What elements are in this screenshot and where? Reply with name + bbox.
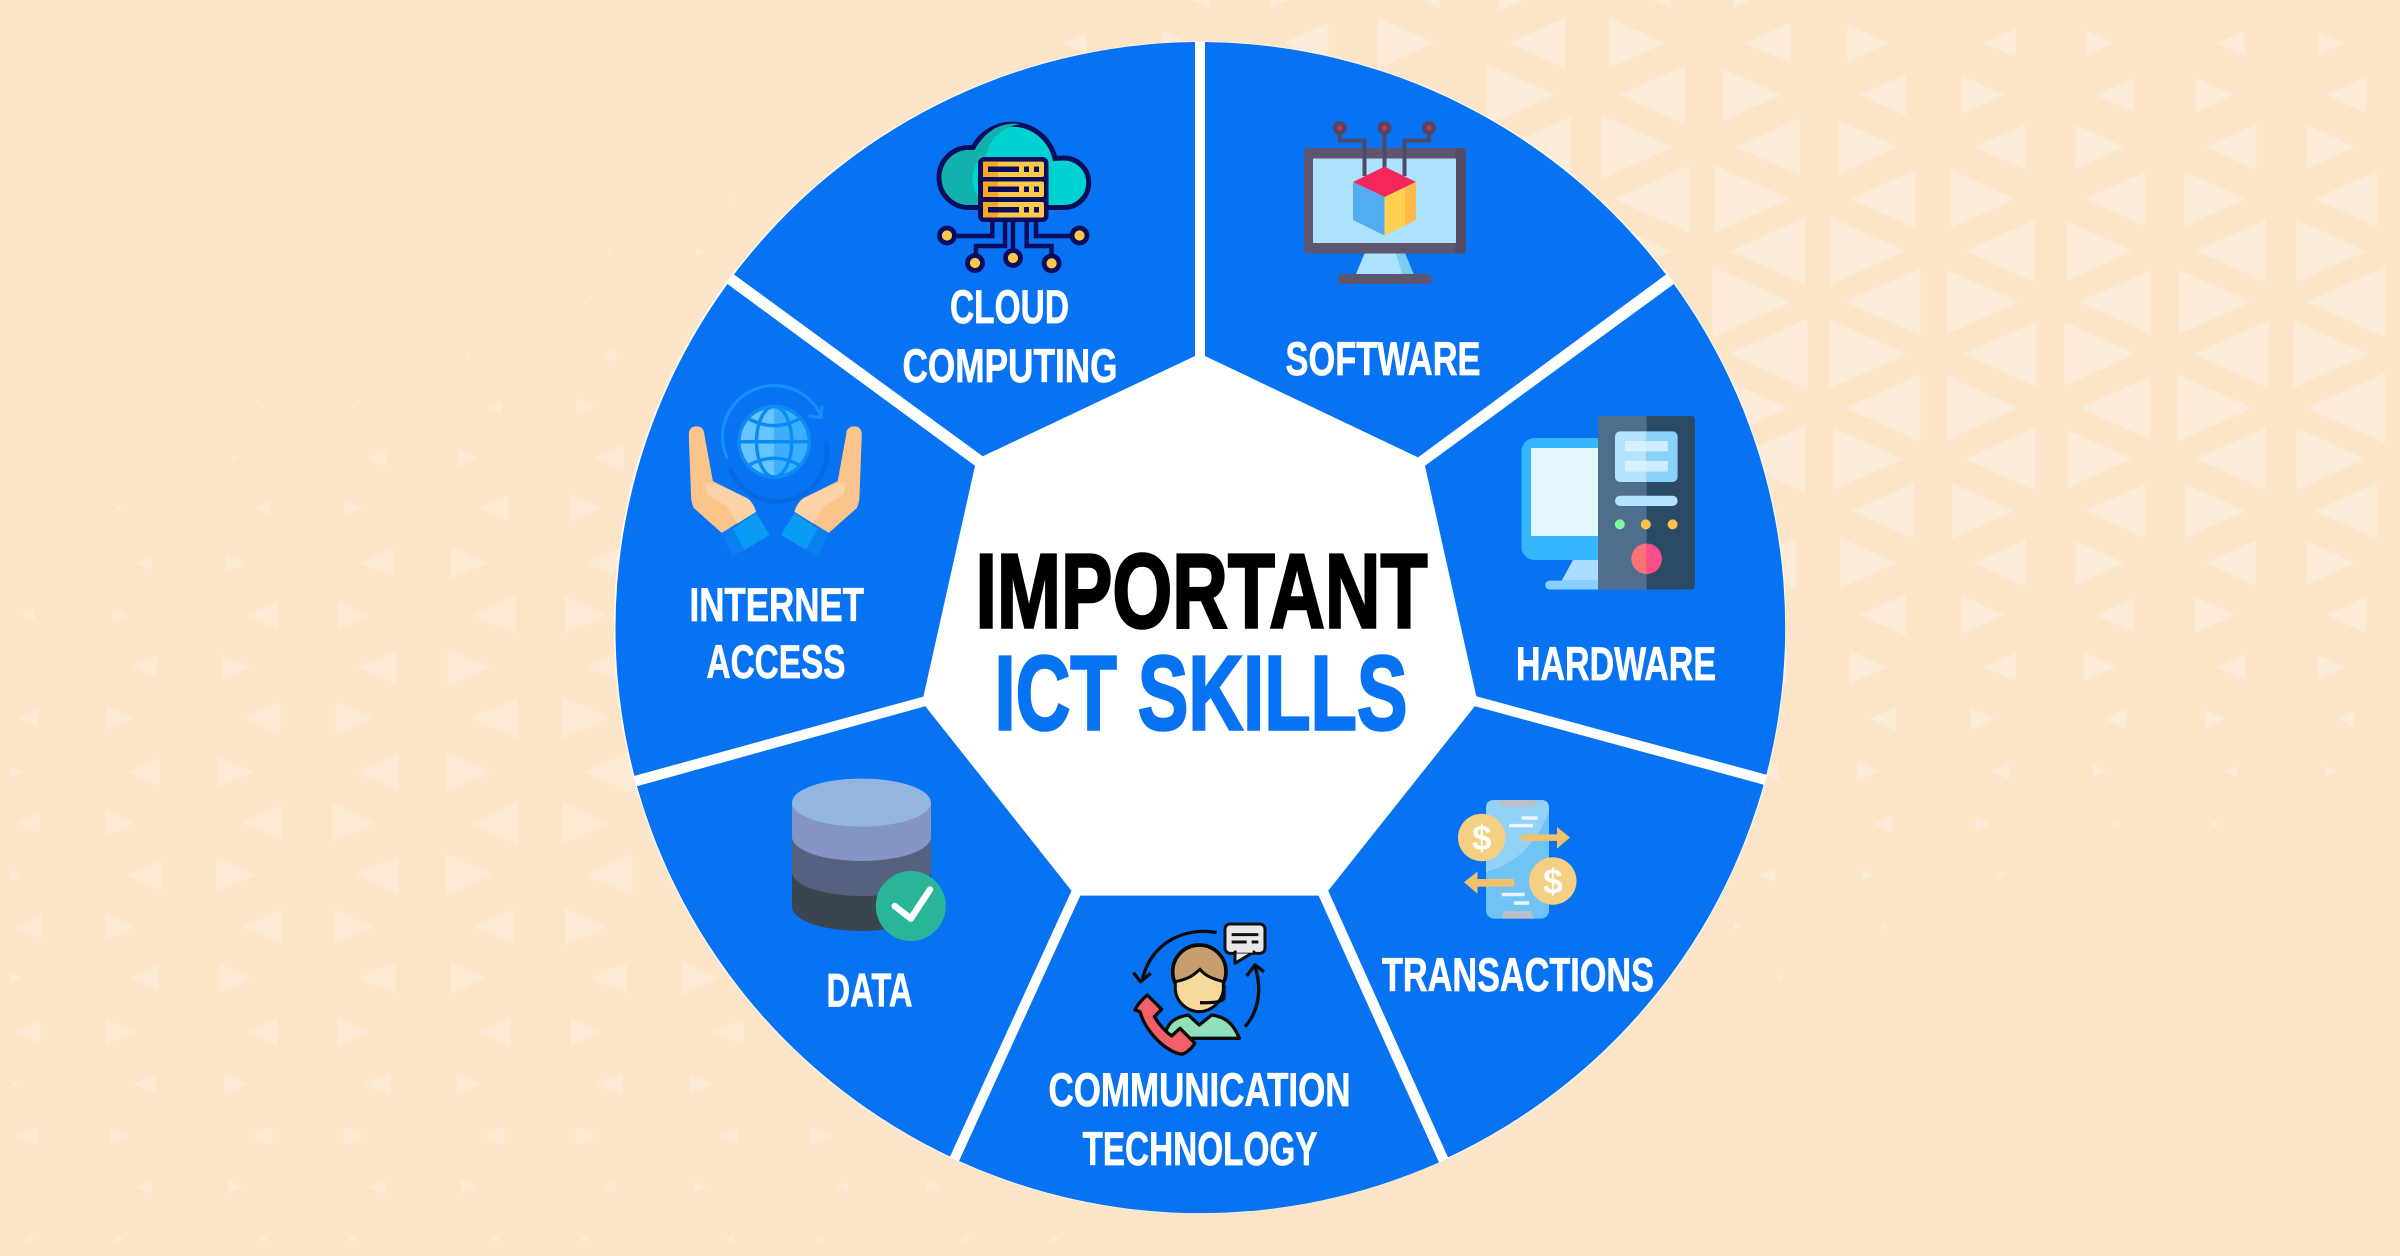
icon: phone with coins [1458, 800, 1577, 919]
panel: software [1205, 42, 1666, 457]
panel: cloud computing [734, 42, 1195, 456]
wheel: seven segment diagram [614, 42, 1786, 1214]
label [690, 578, 864, 688]
label: COMPUTING [902, 339, 1118, 392]
label: INTERNET [690, 578, 864, 631]
panel: transactions [1328, 706, 1764, 1157]
heptagon [924, 354, 1476, 895]
label: ACCESS [706, 635, 846, 688]
title line 2: ICT SKILLS [994, 634, 1408, 752]
label: CLOUD [950, 280, 1069, 333]
label: TECHNOLOGY [1082, 1122, 1318, 1175]
label: COMMUNICATION [1048, 1063, 1350, 1116]
background pattern: triangles upper right [1064, 0, 2385, 981]
panel: hardware [1425, 284, 1785, 775]
label: DATA [826, 964, 912, 1017]
icon: monitor with cube [1304, 121, 1466, 284]
icon: desktop computer [1521, 416, 1695, 590]
label: HARDWARE [1516, 637, 1716, 690]
background pattern: triangles lower left [10, 198, 1060, 1243]
panel: data [637, 706, 1072, 1157]
panel: internet access [615, 284, 975, 776]
icon: call agent [1133, 924, 1265, 1054]
segment shape [1205, 42, 1666, 457]
icon: hands holding globe [689, 386, 862, 556]
icon: phone with coins: $ [1472, 819, 1491, 858]
label [1048, 1063, 1350, 1175]
segment shape [1425, 284, 1785, 775]
panel: communication technology [959, 896, 1439, 1213]
segment shape [959, 896, 1439, 1213]
segment shape [734, 42, 1195, 456]
icon: database with check [792, 779, 946, 941]
segment shape [637, 706, 1072, 1157]
panel: centre heptagon title [924, 354, 1476, 895]
white base disc forming spokes [614, 42, 1786, 1214]
label [902, 280, 1118, 392]
label: TRANSACTIONS [1382, 948, 1654, 1001]
icon: cloud server [939, 124, 1089, 271]
icon: phone with coins: $ [1543, 862, 1563, 902]
title line 1: IMPORTANT [976, 532, 1428, 650]
segment shape [1328, 706, 1764, 1157]
label: SOFTWARE [1286, 332, 1480, 385]
segment shape [615, 284, 975, 776]
